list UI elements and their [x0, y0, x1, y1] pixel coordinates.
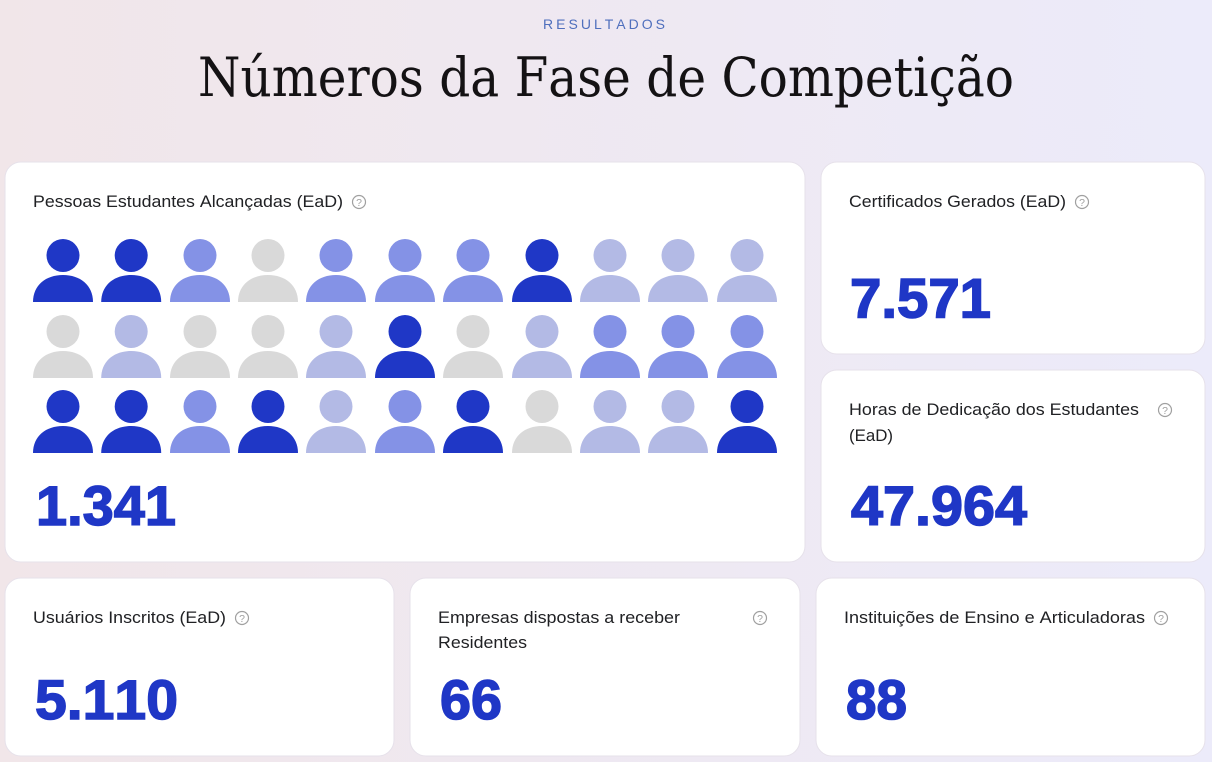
panel: horas de dedicação [821, 370, 1205, 562]
person [580, 315, 640, 378]
person [648, 315, 708, 378]
heading: horas de dedicação: Horas de Dedicação dos Estudantes [849, 401, 1139, 419]
person [170, 239, 230, 302]
number: 66: 66 [440, 668, 502, 731]
number: 1.341: 1.341 [36, 474, 176, 537]
person [101, 390, 161, 453]
number: 47.964: 47.964 [851, 474, 1027, 537]
number: 7.571: 7.571 [850, 266, 991, 330]
person [580, 390, 640, 453]
person [306, 390, 366, 453]
number: 5.110: 5.110 [35, 668, 178, 731]
person [648, 239, 708, 302]
person [512, 390, 572, 453]
person [33, 390, 93, 453]
person [238, 390, 298, 453]
icon: help: ? [356, 197, 362, 209]
person [375, 315, 435, 378]
person [170, 315, 230, 378]
icon: help [352, 196, 366, 209]
person [101, 239, 161, 302]
eyebrow: resultados: RESULTADOS [543, 16, 665, 32]
person [717, 315, 777, 378]
person [512, 239, 572, 302]
icon: help: ? [1158, 613, 1164, 625]
title: Números da Fase de Competição [198, 46, 1014, 109]
person [443, 239, 503, 302]
panel: certificados gerados [821, 162, 1205, 354]
person [375, 390, 435, 453]
panel: empresas [410, 578, 800, 756]
pictogram: people grid [33, 239, 777, 453]
panel: instituições [816, 578, 1205, 756]
heading: usuários inscritos: Usuários Inscritos (EaD) [33, 609, 226, 627]
icon: help [1158, 404, 1172, 417]
panel: usuários inscritos [5, 578, 394, 756]
person [170, 390, 230, 453]
person [512, 315, 572, 378]
icon: help: ? [1162, 405, 1168, 417]
person [306, 239, 366, 302]
person [375, 239, 435, 302]
heading: certificados: Certificados Gerados (EaD) [849, 193, 1066, 211]
person [306, 315, 366, 378]
icon: help: ? [239, 613, 245, 625]
person [717, 239, 777, 302]
person [33, 239, 93, 302]
heading: horas de dedicação [849, 401, 1139, 445]
icon: help: ? [1079, 197, 1085, 209]
icon: help [754, 612, 766, 625]
panel: pessoas estudantes alcançadas [5, 162, 805, 562]
person [33, 315, 93, 378]
heading: pessoas estudantes: Pessoas Estudantes Alcançadas (EaD) [33, 193, 343, 211]
person [443, 390, 503, 453]
person [648, 390, 708, 453]
icon: help [236, 612, 248, 625]
icon: help [1154, 612, 1168, 625]
person [238, 315, 298, 378]
person [717, 390, 777, 453]
person [238, 239, 298, 302]
number: 88: 88 [846, 668, 907, 731]
person [443, 315, 503, 378]
heading: empresas: Residentes [438, 634, 527, 652]
icon: help: ? [757, 613, 763, 625]
heading: empresas [438, 609, 681, 652]
heading: horas de dedicação: (EaD) [849, 427, 893, 445]
icon: help [1076, 196, 1088, 209]
heading: empresas: Empresas dispostas a receber [438, 609, 681, 627]
person [101, 315, 161, 378]
heading: instituições: Instituições de Ensino e Articuladoras [844, 609, 1145, 627]
person [580, 239, 640, 302]
